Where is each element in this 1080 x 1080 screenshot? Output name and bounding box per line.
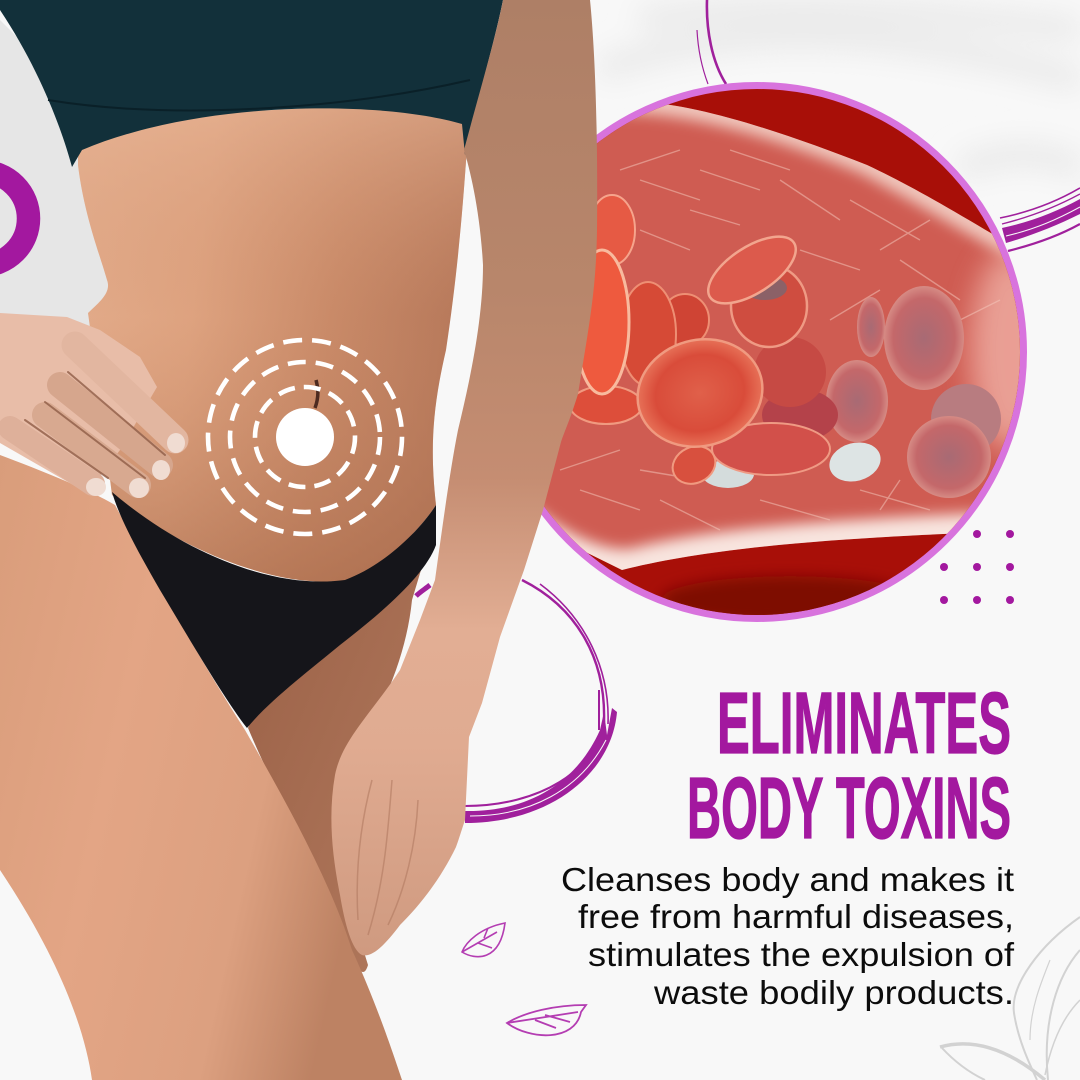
small white cells <box>829 442 881 482</box>
vessel wall <box>544 104 1020 570</box>
target marker: dashed rings on stomach <box>208 340 402 534</box>
brush ring: top right <box>697 0 1080 251</box>
body text <box>561 861 1015 1011</box>
vessel texture <box>560 150 1000 530</box>
underwear <box>112 492 436 728</box>
torso <box>78 100 470 582</box>
icon: large purple leaf <box>507 1005 586 1035</box>
image: blood vessel with red blood cells <box>542 82 1027 622</box>
vessel right glow <box>956 250 1020 458</box>
bra <box>0 0 503 167</box>
icon: small purple leaf <box>462 923 505 957</box>
hand on hip <box>0 313 175 493</box>
title <box>687 675 1011 857</box>
deep red background <box>544 89 1020 615</box>
arm and lower hand <box>331 0 597 955</box>
person: body photograph <box>0 0 597 1080</box>
deep red lower shade <box>658 570 890 615</box>
mid cells <box>762 392 838 436</box>
bra band line <box>48 80 470 110</box>
navel <box>315 380 318 408</box>
vessel top highlight <box>630 104 1004 262</box>
finger creases <box>357 780 418 935</box>
accent: purple ring at left edge <box>0 172 28 266</box>
body text: free from harmful diseases, <box>578 898 1014 935</box>
background: faint grey leaf swirl <box>600 9 1080 170</box>
vessel bottom highlight <box>520 520 980 568</box>
body text: Cleanses body and makes it <box>561 861 1014 898</box>
body text: waste bodily products. <box>653 974 1014 1011</box>
background shape: grey panel behind body <box>0 20 125 345</box>
dot grid <box>940 530 1014 604</box>
left cells <box>670 293 710 344</box>
near thigh and hip <box>0 455 402 1080</box>
icon: decorative grey leaves, bottom right <box>940 917 1080 1080</box>
dim cells <box>884 286 964 390</box>
body text: stimulates the expulsion of <box>588 936 1015 973</box>
brush ring: lower centre <box>416 580 617 823</box>
fingernails <box>86 433 185 498</box>
far thigh <box>248 520 436 972</box>
